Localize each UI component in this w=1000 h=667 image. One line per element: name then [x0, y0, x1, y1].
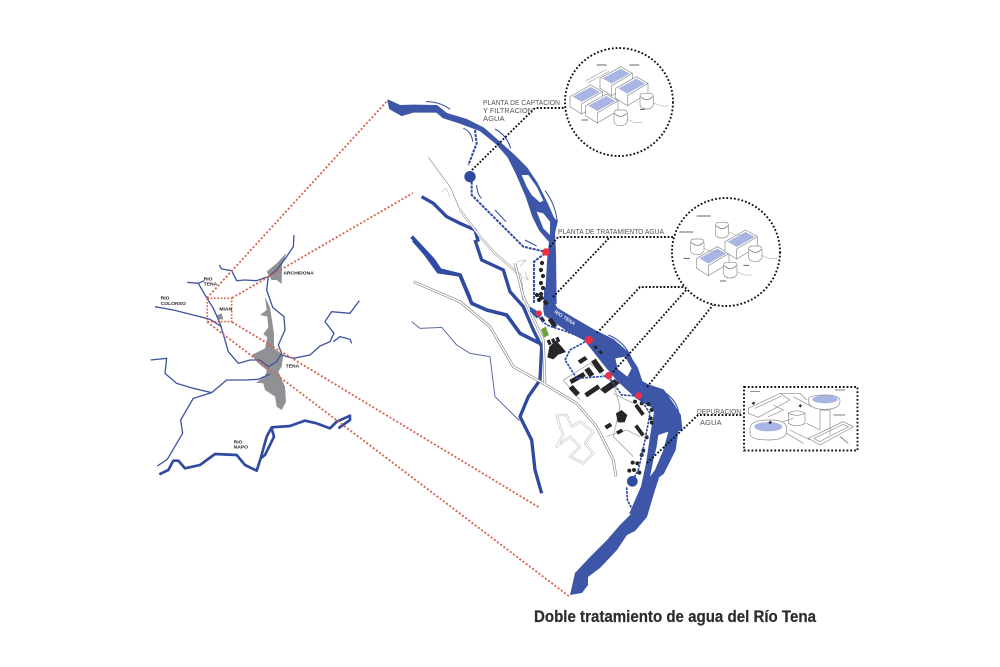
upper tributaries and roads — [412, 157, 528, 300]
leader: intake plant — [472, 108, 565, 170]
label: intake plant: AGUA — [483, 114, 505, 123]
buildings — [538, 295, 620, 397]
planting dots: north corridor — [535, 261, 545, 302]
place labels: TENA — [286, 364, 300, 370]
place labels: RIO — [161, 296, 170, 302]
place labels: MIAN — [219, 306, 232, 312]
detail box: depuration plant — [744, 387, 858, 450]
detail circle: water treatment — [672, 198, 780, 306]
label: intake plant: PLANTA DE CAPTACION — [483, 98, 560, 107]
river: Rio Tena lower reach — [604, 380, 679, 513]
treatment point marker: upper — [542, 248, 550, 256]
flow arrow — [608, 335, 632, 359]
river: Rio Tena outlet — [570, 478, 659, 595]
label: depuration — [697, 407, 741, 427]
pipeline: intake to treatment — [468, 130, 545, 303]
pipeline: to depuration — [627, 396, 650, 508]
place labels: ARCHIDONA — [283, 270, 314, 276]
place labels: RIO — [234, 439, 243, 445]
label: intake plant: Y FILTRACION — [483, 106, 533, 115]
place labels — [161, 270, 314, 451]
pipeline: treatment network — [537, 315, 638, 396]
place labels: COLONSO — [161, 301, 186, 307]
road — [413, 282, 616, 477]
label: intake plant — [483, 98, 560, 123]
river island — [615, 357, 632, 377]
campus outlines — [557, 415, 593, 463]
river islands — [522, 175, 550, 235]
leader: depuration — [647, 415, 743, 463]
label: depuration: AGUA — [700, 418, 722, 427]
river: Rio Tena upper reach — [388, 101, 557, 303]
locator box — [207, 298, 232, 322]
river island — [650, 432, 668, 477]
river name: RIO TENA — [553, 309, 576, 328]
label: depuration: DEPURACION — [697, 407, 741, 416]
intake basin — [464, 171, 476, 182]
detail circle: intake and filtration — [565, 48, 673, 156]
flow arrows — [426, 102, 557, 246]
river: Rio Napo — [159, 416, 350, 474]
rivers: tributaries — [151, 235, 359, 466]
place labels: TENA — [204, 281, 218, 287]
place labels: RIO — [204, 276, 213, 282]
label: treatment plant: PLANTA DE TRATAMIENTO AGUA — [558, 227, 665, 236]
map: Tena region overview — [151, 235, 359, 474]
projection lines — [207, 100, 570, 597]
river: Rio Tena middle reach — [530, 288, 682, 430]
depuration basin — [627, 476, 638, 487]
title: Doble tratamiento de agua del Río Tena — [534, 608, 817, 626]
urban area: Archidona and Tena — [217, 253, 287, 410]
lower tributaries and road — [412, 240, 640, 493]
place labels: NAPO — [234, 445, 248, 451]
treatment point markers — [536, 310, 642, 399]
leader: treatment plant — [550, 237, 713, 387]
